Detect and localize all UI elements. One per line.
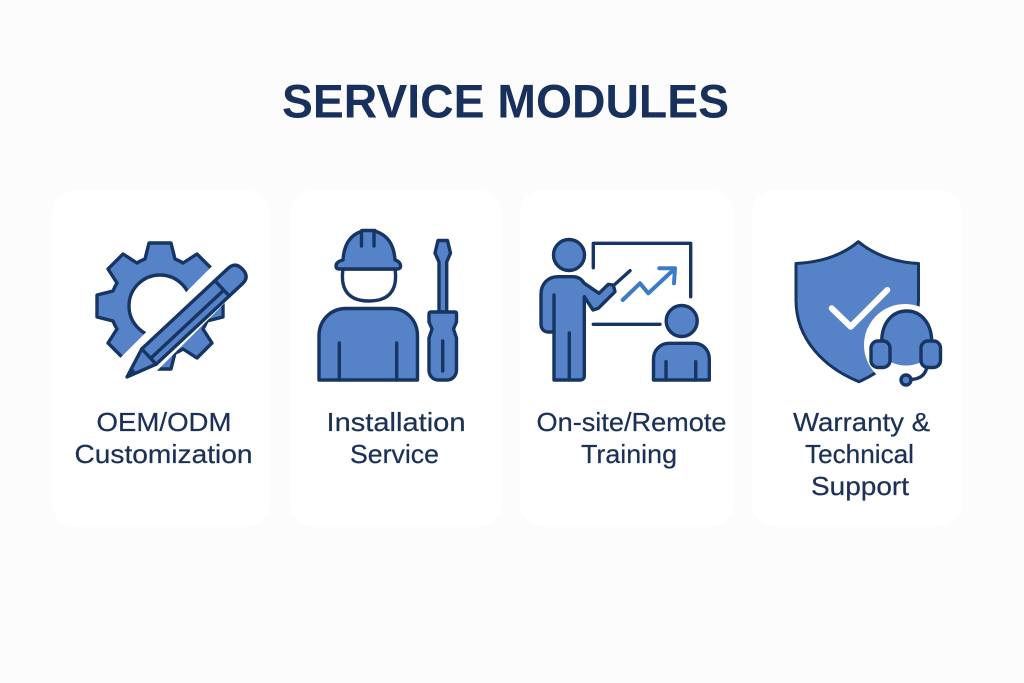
icon: gear and pencil [97,243,250,385]
label: Installation [326,407,466,437]
label: Technical [805,439,914,469]
title: SERVICE MODULES [282,74,729,128]
label [326,407,466,469]
panel: warranty and technical support [752,190,962,527]
label: Training [581,439,677,469]
label: Warranty & [793,407,930,437]
label: On-site/Remote [536,407,726,437]
label: Support [811,471,910,501]
icon: shield with headset [796,242,946,386]
label: Customization [74,439,252,469]
icon: worker and screwdriver [319,230,456,380]
panel: OEM/ODM customization [52,190,270,527]
label [536,407,726,469]
label [74,407,252,469]
panel: installation service [290,190,502,527]
label: Service [350,439,439,469]
label: OEM/ODM [96,407,232,437]
icon: trainer with chart [541,240,709,380]
panel: on-site/remote training [520,190,734,527]
label [793,407,930,501]
